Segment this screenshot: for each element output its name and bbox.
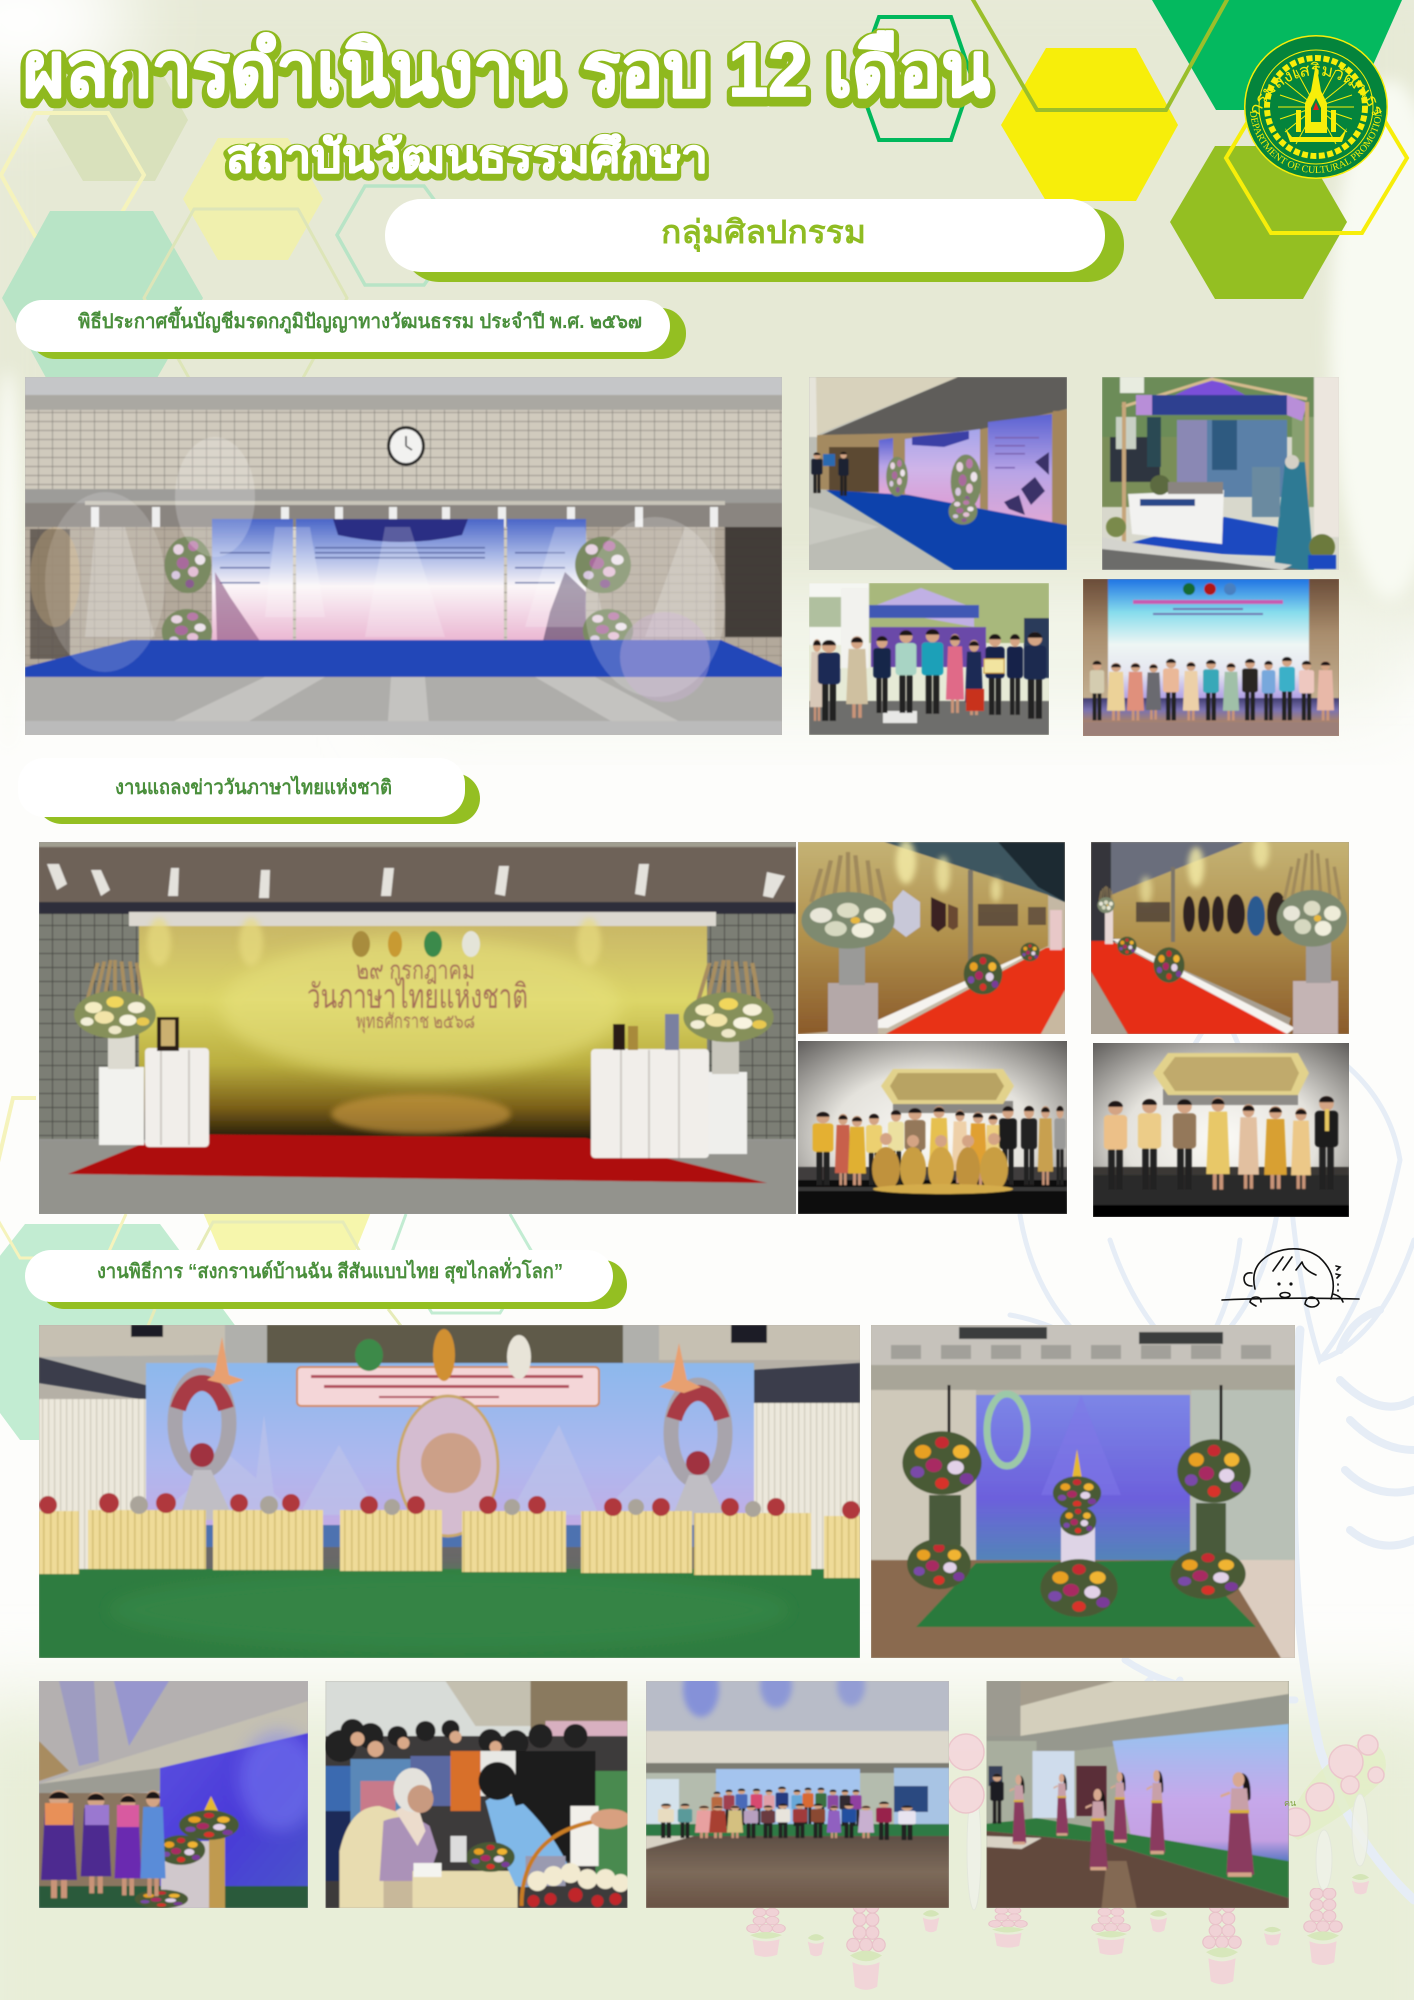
decorative hexagons upper right (857, 0, 1407, 299)
decorative hexagons lower left (0, 1098, 532, 1440)
section heading pill 3 (25, 1250, 627, 1309)
photo: backdrop seen in perspective (809, 377, 1067, 570)
photo: golden hall mirrored (1091, 842, 1349, 1034)
decorative hexagons upper left (1, 60, 460, 387)
photo: attendants with floral stand (39, 1681, 308, 1908)
photo: Thai language day backdrop (39, 842, 796, 1214)
photo: Songkran ceremony tables (39, 1325, 860, 1658)
photo: indigo textile booth (1102, 377, 1339, 570)
photo: golden hall with red carpet (798, 842, 1065, 1034)
department seal: DEPARTMENT OF CULTURAL PROMOTION (1250, 110, 1382, 173)
photo: dancers (986, 1681, 1289, 1908)
wall clock (387, 426, 425, 466)
photo: group at booth (809, 583, 1049, 735)
section heading pill 2: งานแถลงข่าววันภาษาไทยแห่งชาติ (115, 775, 392, 799)
section heading pill 1: พิธีประกาศขึ้นบัญชีมรดกภูมิปัญญาทางวัฒนธรรม ประจำปี พ.ศ. ๒๕๖๗ (78, 306, 642, 335)
subtitle: สถาบันวัฒนธรรมศึกษา (226, 133, 708, 185)
backdrop text (307, 955, 528, 1034)
photo: group seated before backdrop (646, 1681, 949, 1908)
heading pill: กลุ่มศิลปกรรม: กลุ่มศิลปกรรม (661, 214, 866, 253)
section heading pill 1 (16, 300, 686, 359)
photo: stage backdrop with blue carpet (25, 377, 782, 735)
photo: Songkran floral stage (871, 1325, 1295, 1658)
photo: elder pouring water ceremony (326, 1681, 628, 1908)
backdrop text: พุทธศักราช ๒๕๖๘ (356, 1011, 475, 1034)
photo: award group in front of screen (1083, 579, 1339, 736)
backdrop text: วันภาษาไทยแห่งชาติ (307, 977, 528, 1016)
section heading pill 2 (18, 758, 480, 824)
section heading pill 3: งานพิธีการ “สงกรานต์บ้านฉัน สีสันแบบไทย สุขไกลทั่วโลก” (97, 1256, 563, 1284)
heading pill: กลุ่มศิลปกรรม (385, 199, 1124, 282)
photo: stage group of dignitaries (1093, 1043, 1349, 1217)
photo: stage group with dancers (798, 1041, 1067, 1214)
backdrop panels (212, 519, 586, 641)
department seal (1244, 35, 1388, 179)
backdrop text: ๒๙ กรกฎาคม (356, 955, 475, 985)
title: ผลการดำเนินงาน รอบ 12 เดือน (23, 32, 990, 117)
icon: doodle child peeking over a line (1222, 1249, 1359, 1307)
small stray caption: คน (1284, 1798, 1296, 1808)
subtitle: สถาบันวัฒนธรรมศึกษา (226, 130, 708, 182)
decorative lotus line illustration (1010, 1005, 1414, 1900)
jasmine and rose garlands behind the photos (747, 1734, 1386, 1990)
title: ผลการดำเนินงาน รอบ 12 เดือน (23, 28, 990, 113)
